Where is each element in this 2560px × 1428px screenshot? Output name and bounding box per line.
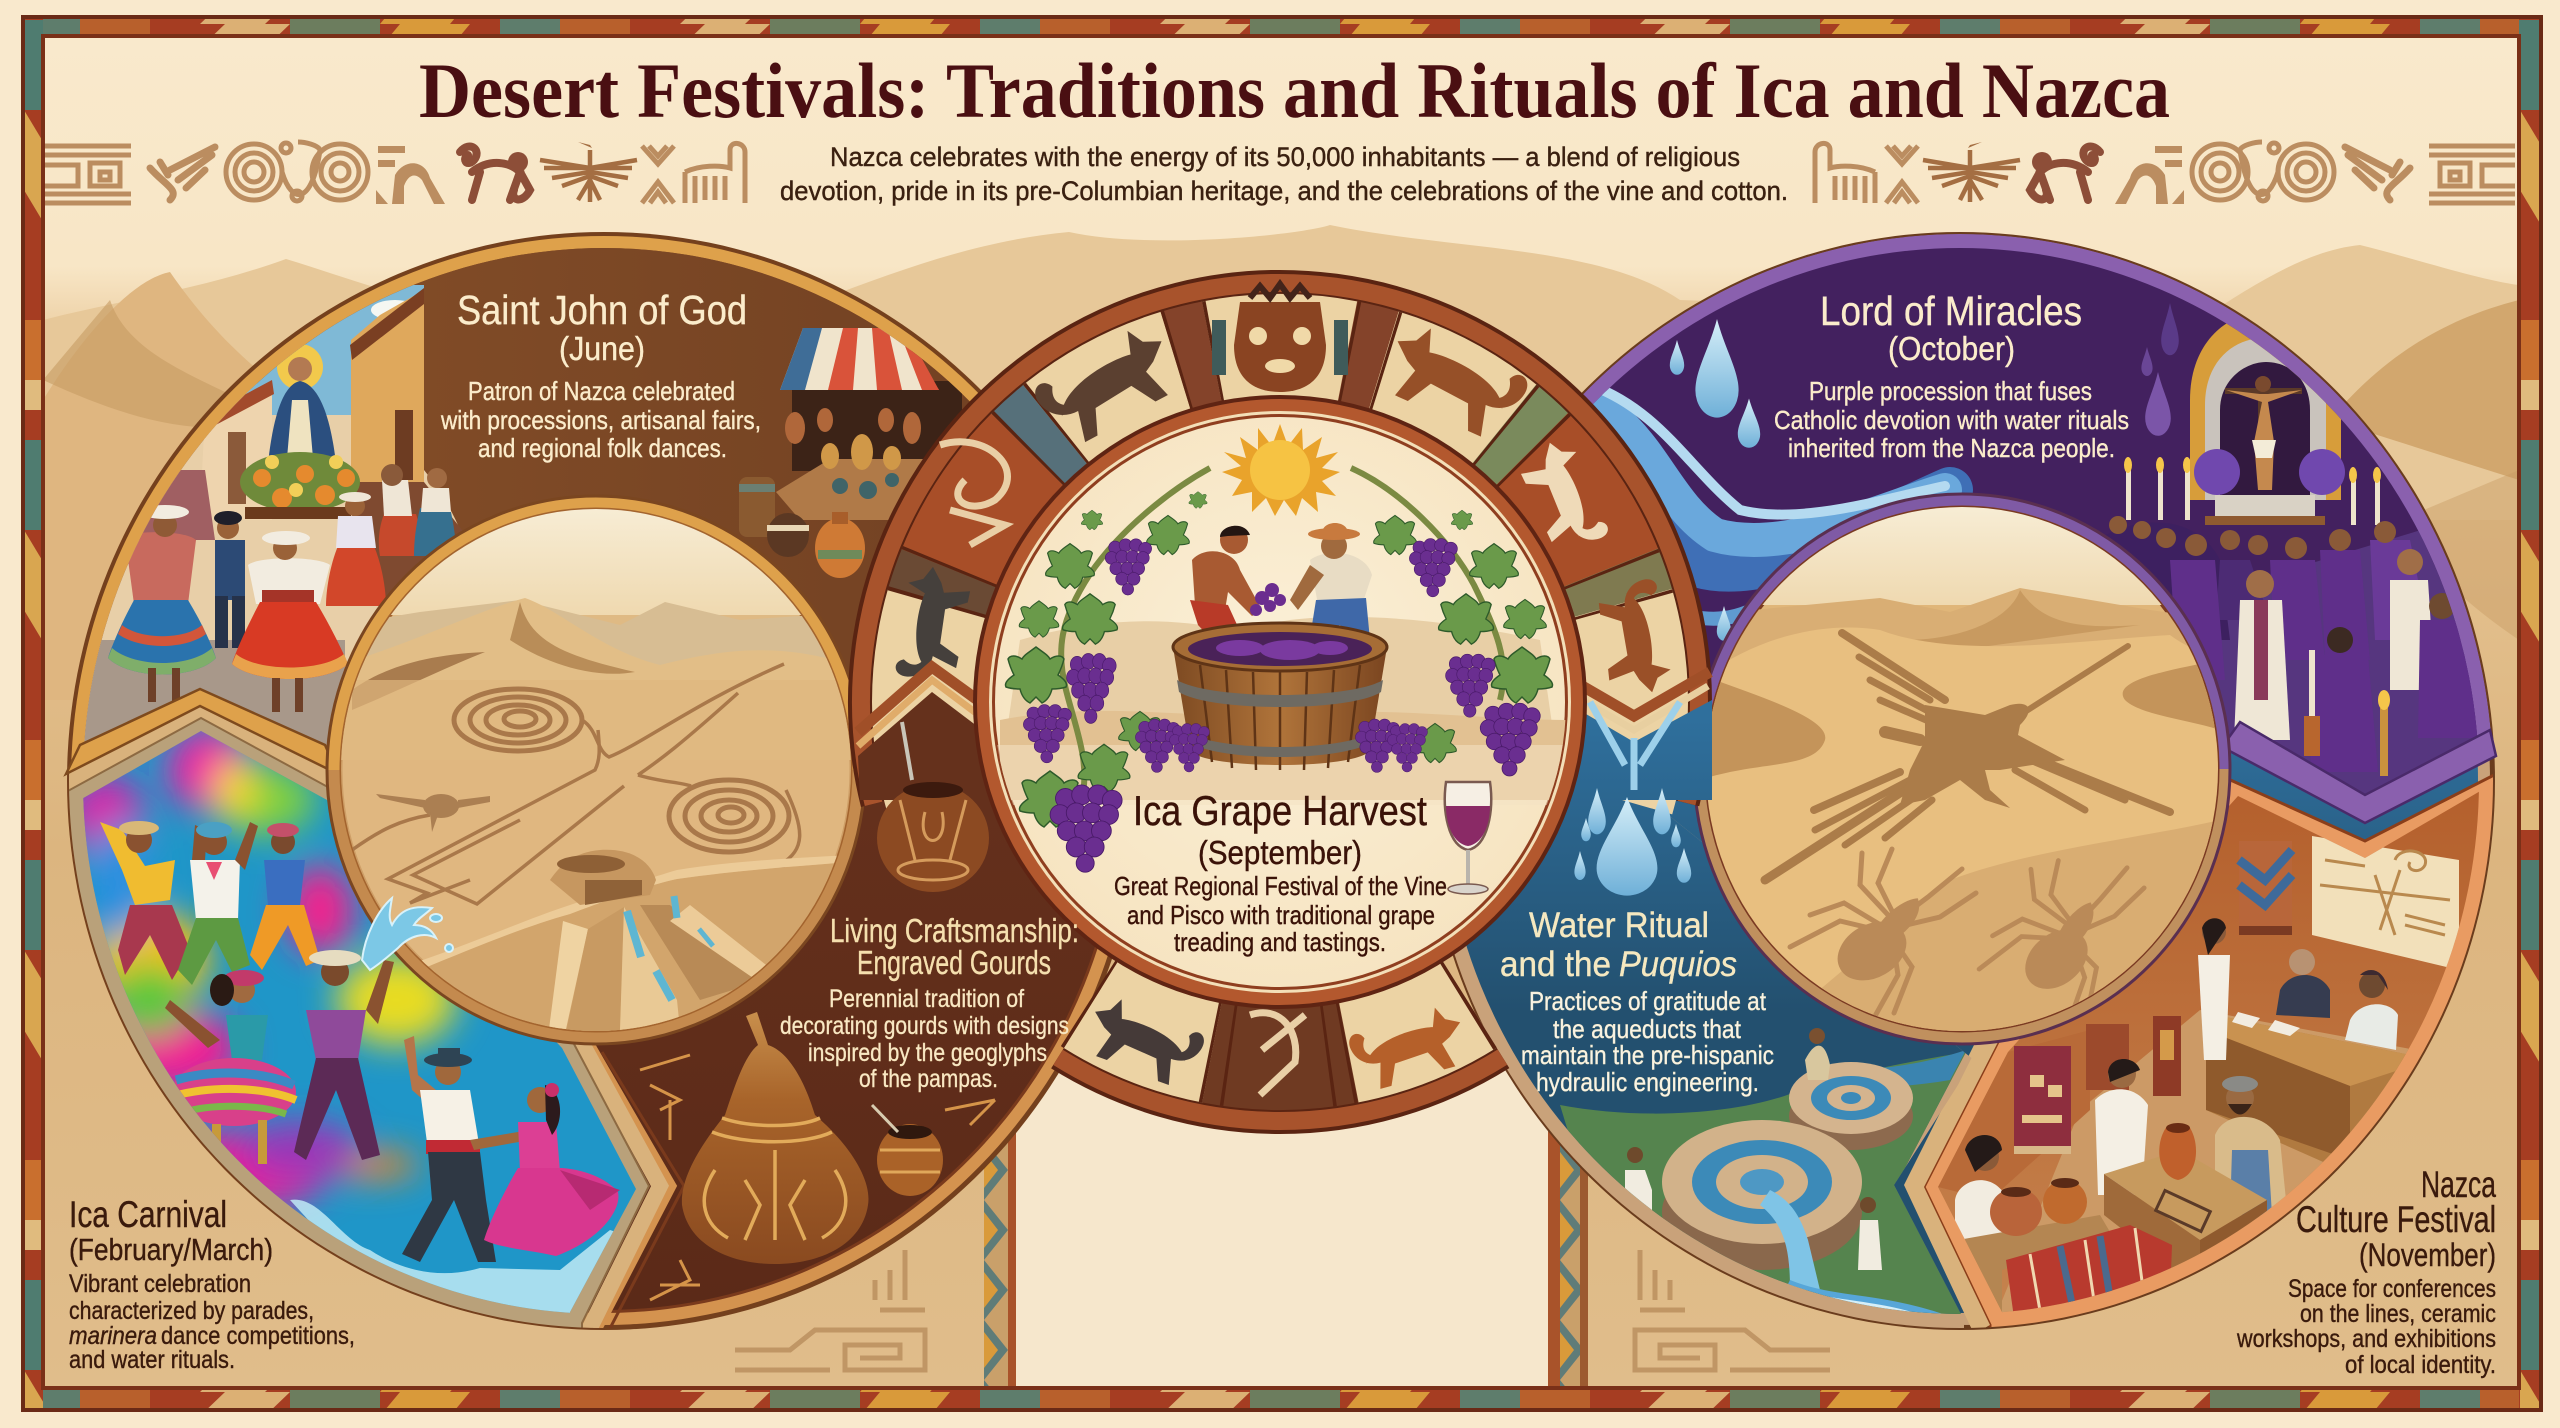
gourd panel peak — [858, 667, 1008, 800]
text: Lord of Miracles: inherited from the Nazca people. — [1788, 433, 2115, 463]
text: Lord of Miracles: Lord of Miracles — [1820, 288, 2082, 334]
hummingbird geoglyph — [1765, 633, 2170, 880]
text: Ica Carnival: (February/March) — [69, 1232, 273, 1267]
panel: Ica Carnival illustration — [69, 717, 650, 1328]
left wheel base — [67, 232, 1141, 1340]
text: Water Ritual and the Puquios: Puquios — [1619, 945, 1737, 984]
text: Lord of Miracles: Purple procession that fuses — [1809, 376, 2092, 406]
text: Nazca Culture Festival — [2236, 1164, 2496, 1379]
gold chevron divider — [66, 689, 338, 774]
right wheel base — [1425, 232, 2495, 1330]
text: Saint John of God: and regional folk dances. — [478, 433, 727, 463]
purple crowd — [2170, 540, 2418, 680]
text: Living Craftsmanship: decorating gourds with designs — [780, 1012, 1069, 1040]
left desert window — [327, 495, 865, 1044]
carnival dancers — [100, 821, 640, 1330]
market stall — [739, 328, 962, 578]
lines and trapezoids — [352, 664, 816, 914]
text: Ica Grape Harvest: Ica Grape Harvest — [1133, 787, 1427, 834]
central medallion ring — [703, 125, 1857, 1279]
text: Lord of Miracles: Catholic devotion with water rituals — [1774, 405, 2129, 435]
grape barrel — [1173, 623, 1387, 770]
procession scene — [84, 285, 462, 746]
text: Saint John of God: Patron of Nazca celebrated — [468, 376, 735, 406]
bottom center cream panel with side stripes — [984, 1060, 1588, 1388]
text: Lord of Miracles — [1774, 288, 2129, 463]
text: Saint John of God — [440, 287, 761, 463]
text: Ica Carnival: Vibrant celebration — [69, 1270, 251, 1298]
intro text: devotion, pride in its pre-Columbian heritage, and the celebrations of the vine and cotton. — [780, 176, 1788, 206]
text: Living Craftsmanship: of the pampas. — [859, 1065, 998, 1093]
vines — [1061, 468, 1503, 800]
text: Ica Carnival: and water rituals. — [69, 1346, 235, 1374]
text: Ica Carnival: dance competitions, — [161, 1322, 355, 1350]
text: Water Ritual and the Puquios: Water Ritual — [1529, 906, 1709, 945]
text: Saint John of God: Saint John of God — [457, 287, 747, 333]
text: Ica Grape Harvest: treading and tastings. — [1174, 927, 1386, 957]
panel: Lord of Miracles — [1583, 234, 2490, 794]
leaves — [1005, 492, 1553, 827]
priests and devotees — [2234, 549, 2480, 776]
text: Ica Grape Harvest: and Pisco with traditional grape — [1127, 900, 1435, 930]
shrine — [2190, 312, 2345, 525]
gap between right lower panels — [1904, 1042, 1998, 1334]
ring animal motifs — [889, 284, 1673, 1095]
text: Lord of Miracles: (October) — [1888, 330, 2015, 367]
pottery workshop — [1955, 1059, 2288, 1325]
text: Saint John of God: with processions, artisanal fairs, — [440, 405, 761, 435]
text: Water Ritual and the Puquios: maintain the pre-hispanic — [1521, 1040, 1774, 1070]
candles — [2126, 470, 2380, 525]
text: Ica Carnival: characterized by parades, — [69, 1297, 314, 1325]
text: Nazca Culture Festival: on the lines, ceramic — [2300, 1300, 2496, 1328]
text: Living Craftsmanship — [780, 912, 1079, 1093]
panel: Nazca Culture Festival illustration — [1924, 774, 2493, 1328]
geoglyph frieze left — [45, 142, 745, 204]
panel: Saint John of God — [71, 236, 978, 760]
text: Ica Carnival — [69, 1194, 355, 1374]
text: Ica Carnival: marinera — [69, 1322, 157, 1350]
intro text: Nazca celebrates with the energy of its 50,000 inhabitants — a blend of religious — [830, 142, 1740, 172]
text: Ica Grape Harvest — [1114, 787, 1447, 957]
text: Water Ritual and the Puquios: Practices of gratitude at — [1529, 986, 1767, 1016]
text: Water Ritual and the Puquios: and the — [1500, 945, 1611, 984]
riverbank scene — [1560, 1028, 1966, 1314]
text: Nazca Culture Festival: Space for conferences — [2288, 1275, 2496, 1303]
text: Living Craftsmanship: Engraved Gourds — [857, 944, 1051, 981]
text: Nazca Culture Festival: Nazca — [2421, 1164, 2496, 1205]
text: Saint John of God: (June) — [559, 330, 645, 367]
decorative Greek key left — [735, 1250, 925, 1370]
grape clusters — [1023, 539, 1540, 872]
geoglyph frieze right — [1815, 142, 2515, 204]
decorative Greek key right — [1635, 1250, 1830, 1370]
gourd illustrations — [640, 722, 995, 1300]
water stream — [1560, 385, 1950, 619]
title: Desert Festivals: Traditions and Rituals of Ica and Nazca — [419, 47, 2170, 134]
text: Ica Grape Harvest: (September) — [1198, 834, 1362, 871]
purple chevron — [2222, 722, 2496, 823]
conference table — [2198, 918, 2410, 1165]
wine glass — [1445, 782, 1491, 894]
text: Water Ritual and the Puquios — [1500, 906, 1774, 1097]
text: Living Craftsmanship: Living Craftsmanship: — [830, 912, 1079, 949]
text: Nazca Culture Festival: of local identity. — [2345, 1351, 2496, 1379]
text: Living Craftsmanship: Perennial tradition of — [829, 985, 1024, 1013]
text: Nazca Culture Festival: workshops, and exhibitions — [2236, 1325, 2496, 1353]
water splash — [362, 898, 453, 970]
text: Ica Grape Harvest: Great Regional Festival of the Vine — [1114, 871, 1447, 901]
text: Water Ritual and the Puquios: hydraulic engineering. — [1536, 1067, 1759, 1097]
text: Nazca Culture Festival: Culture Festival — [2296, 1199, 2496, 1240]
spiral geoglyphs — [454, 689, 789, 852]
tapestries and chart — [2014, 836, 2459, 1154]
text: Ica Carnival: Ica Carnival — [69, 1194, 227, 1235]
aqueduct — [420, 850, 850, 1040]
water panel peak with falls — [1562, 672, 1712, 800]
intro text — [780, 142, 1788, 206]
panel: Water Ritual scene — [1454, 816, 1972, 1328]
text: Nazca Culture Festival: (November) — [2359, 1237, 2496, 1273]
text: Living Craftsmanship: inspired by the geoglyphs — [808, 1039, 1047, 1067]
workers treading grapes — [1190, 523, 1372, 666]
central circle — [973, 395, 1587, 1009]
water droplets — [1574, 788, 1691, 896]
text: Water Ritual and the Puquios: the aqueducts that — [1553, 1014, 1742, 1044]
sun — [1222, 424, 1340, 516]
right desert window — [1694, 494, 2240, 1044]
gap between panels — [69, 708, 326, 790]
spider geoglyphs — [1790, 849, 1976, 1025]
